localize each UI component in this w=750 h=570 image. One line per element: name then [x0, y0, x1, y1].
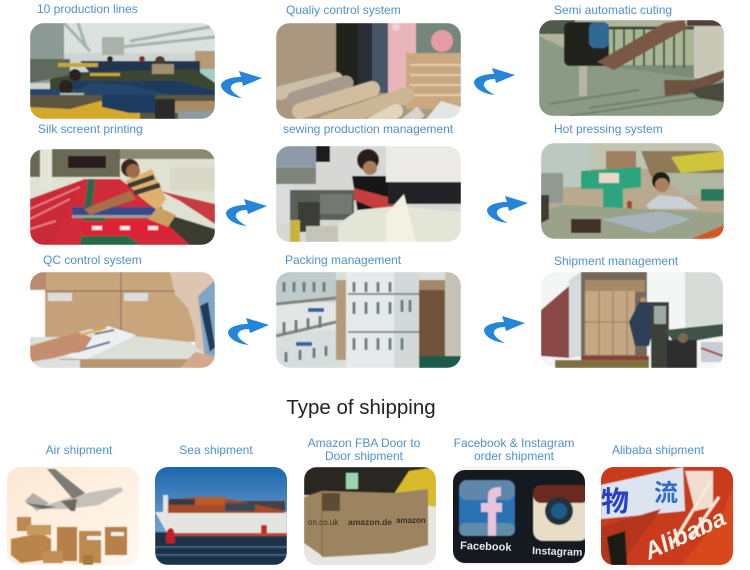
label: Air shipment: Air shipment [46, 443, 112, 457]
photo: sea shipment [155, 467, 287, 565]
photo: Amazon box: amazon [396, 516, 426, 525]
photo: Alibaba logistics: 流 [654, 480, 678, 507]
photo: hot pressing [541, 143, 724, 239]
arrow 4 [487, 196, 528, 223]
label: Sea shipment: Sea shipment [179, 443, 253, 457]
arrow 5 [228, 318, 269, 345]
photo: air shipment [7, 467, 139, 565]
label: Facebook and Instagram order shipment [454, 436, 574, 462]
photo: Amazon box [304, 467, 436, 565]
photo: QC control [30, 272, 215, 368]
photo: shipment loading [541, 272, 723, 368]
label: Packing management: Packing management [285, 253, 401, 267]
photo: Facebook and Instagram [453, 467, 585, 565]
arrow 6 [484, 316, 525, 343]
label: Silk screen printing: Silk screent printing [38, 122, 143, 136]
photo: semi automatic cutting [539, 20, 724, 116]
label: Amazon FBA Door to Door shipment [308, 436, 420, 462]
photo: Alibaba logistics [601, 467, 733, 565]
photo: silk screen printing [30, 149, 215, 245]
photo: packing [276, 272, 461, 368]
arrow 2 [474, 68, 515, 95]
label: Amazon FBA Door to Door shipment: Door shipment [325, 448, 403, 462]
photo: Facebook and Instagram: Instagram [532, 545, 582, 559]
label: sewing production management: sewing production management [283, 122, 453, 136]
arrow 1 [221, 71, 262, 98]
title: Type of shipping: Type of shipping [286, 396, 436, 419]
label: Amazon FBA Door to Door shipment: Amazon FBA Door to [308, 436, 420, 450]
arrow 3 [226, 199, 267, 226]
photo: sewing production [276, 146, 461, 242]
photo: fabric rolls [276, 23, 461, 119]
label: Semi automatic cutting: Semi automatic cuting [554, 3, 672, 17]
label: Facebook and Instagram order shipment: order shipment [474, 448, 554, 462]
label: Facebook and Instagram order shipment: Facebook & Instagram [454, 436, 574, 450]
label: Shipment management: Shipment management [554, 254, 678, 268]
photo: production lines [30, 23, 215, 119]
label: Hot pressing system: Hot pressing system [554, 122, 663, 136]
photo: Facebook and Instagram: Facebook [460, 540, 513, 554]
photo: Amazon box: on.co.uk [308, 518, 339, 527]
photo: Alibaba logistics: Alibaba [639, 504, 730, 565]
label: 10 production lines: 10 production lines [37, 2, 138, 16]
photo: Amazon box: amazon.de [348, 517, 392, 527]
label: Quality control system: Qualiy control system [286, 3, 401, 17]
label: Alibaba shipment: Alibaba shipment [612, 443, 704, 457]
photo: Alibaba logistics: 物 [601, 486, 629, 517]
label: QC control system: QC control system [43, 253, 142, 267]
